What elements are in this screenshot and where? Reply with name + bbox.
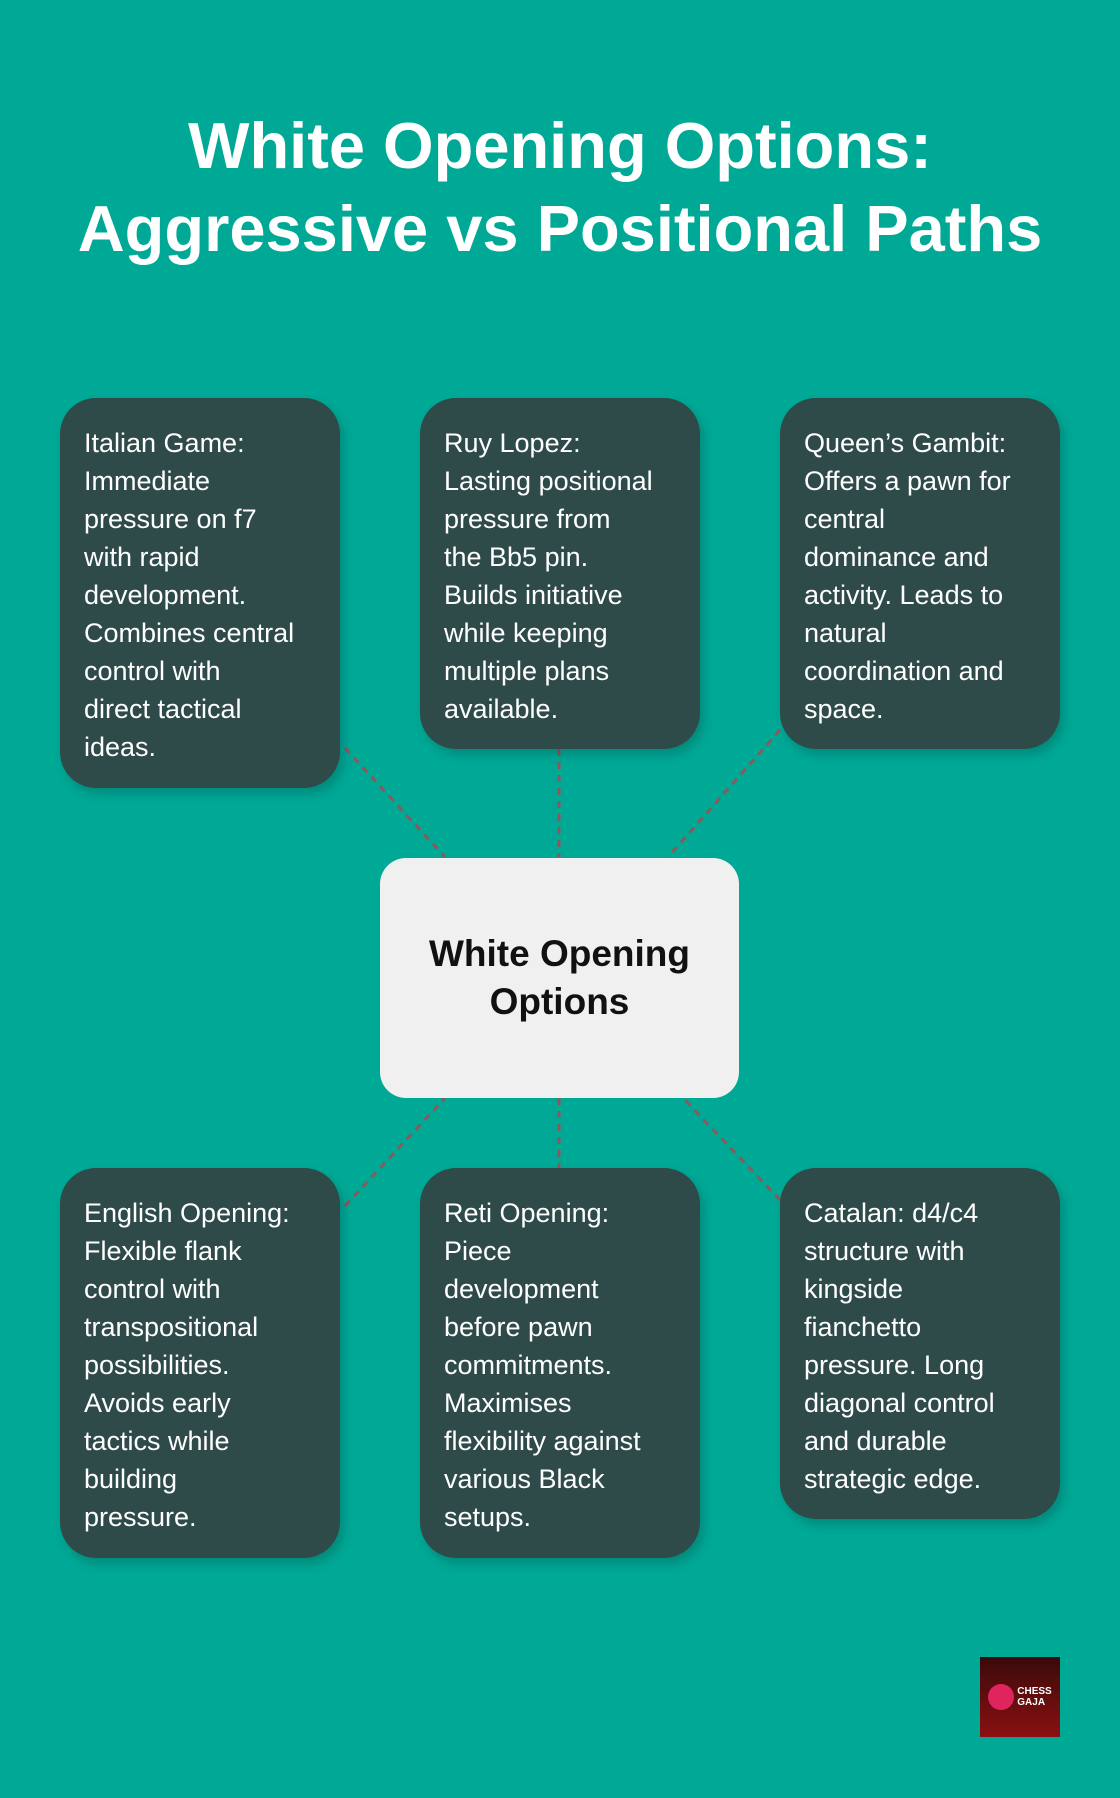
panel: Queen's Gambit: natural: [804, 618, 887, 648]
panel: Ruy Lopez: Lasting positional: [444, 466, 653, 496]
panel: Italian Game: Italian Game:: [84, 428, 245, 458]
panel: Reti Opening: Piece: [444, 1236, 512, 1266]
panel: Catalan: diagonal control: [804, 1388, 995, 1418]
panel: Catalan: fianchetto: [804, 1312, 921, 1342]
panel: Queen's Gambit: dominance and: [804, 542, 989, 572]
panel: English Opening: tactics while: [84, 1426, 230, 1456]
panel: Reti Opening: Reti Opening:: [444, 1198, 609, 1228]
panel: Italian Game: with rapid: [84, 542, 200, 572]
panel: Catalan: kingside: [804, 1274, 903, 1304]
panel: Reti Opening: flexibility against: [444, 1426, 641, 1456]
center node: White Opening: [429, 933, 690, 974]
panel: Queen's Gambit: [780, 398, 1060, 749]
panel: Reti Opening: before pawn: [444, 1312, 593, 1342]
panel: Reti Opening: setups.: [444, 1502, 531, 1532]
panel: Catalan: pressure. Long: [804, 1350, 984, 1380]
panel: Reti Opening: Maximises: [444, 1388, 572, 1418]
panel: Italian Game: control with: [84, 656, 221, 686]
panel: English Opening: transpositional: [84, 1312, 258, 1342]
panel: Reti Opening: [420, 1168, 700, 1558]
panel: Reti Opening: various Black: [444, 1464, 605, 1494]
panel: Queen's Gambit: activity. Leads to: [804, 580, 1003, 610]
panel: Italian Game: Immediate: [84, 466, 210, 496]
panel: Ruy Lopez: while keeping: [444, 618, 608, 648]
panel: Italian Game: [60, 398, 340, 788]
panel: Catalan: and durable: [804, 1426, 947, 1456]
title: White Opening Options:: [188, 109, 932, 182]
panel: English Opening: pressure.: [84, 1502, 197, 1532]
title: Aggressive vs Positional Paths: [78, 192, 1042, 265]
panel: English Opening: [60, 1168, 340, 1558]
panel: English Opening: Flexible flank: [84, 1236, 242, 1266]
panel: Queen's Gambit: Queen’s Gambit:: [804, 428, 1006, 458]
panel: Ruy Lopez: pressure from: [444, 504, 611, 534]
panel: Reti Opening: commitments.: [444, 1350, 612, 1380]
panel: Queen's Gambit: coordination and: [804, 656, 1004, 686]
panel: Italian Game: ideas.: [84, 732, 156, 762]
panel: Italian Game: Combines central: [84, 618, 294, 648]
panel: Ruy Lopez: Ruy Lopez:: [444, 428, 581, 458]
panel: English Opening: English Opening:: [84, 1198, 290, 1228]
panel: Catalan: strategic edge.: [804, 1464, 981, 1494]
panel: Italian Game: development.: [84, 580, 246, 610]
center node: Options: [490, 981, 629, 1022]
panel: Catalan: [780, 1168, 1060, 1519]
panel: Ruy Lopez: Builds initiative: [444, 580, 623, 610]
panel: Catalan: structure with: [804, 1236, 965, 1266]
panel: Ruy Lopez: the Bb5 pin.: [444, 542, 588, 572]
logo: CHESS: [1017, 1686, 1052, 1697]
logo: [980, 1657, 1060, 1737]
panel: English Opening: building: [84, 1464, 177, 1494]
panel: English Opening: Avoids early: [84, 1388, 231, 1418]
center node: [380, 858, 739, 1098]
panel: Catalan: Catalan: d4/c4: [804, 1198, 978, 1228]
logo: GAJA: [1017, 1697, 1045, 1708]
panel: Ruy Lopez: available.: [444, 694, 558, 724]
panel: Italian Game: direct tactical: [84, 694, 242, 724]
panel: Ruy Lopez: multiple plans: [444, 656, 609, 686]
panel: English Opening: control with: [84, 1274, 221, 1304]
panel: Italian Game: pressure on f7: [84, 504, 257, 534]
panel: Reti Opening: development: [444, 1274, 599, 1304]
title: [78, 109, 1042, 265]
panel: Queen's Gambit: space.: [804, 694, 884, 724]
panel: English Opening: possibilities.: [84, 1350, 230, 1380]
panel: Ruy Lopez: [420, 398, 700, 749]
panel: Queen's Gambit: central: [804, 504, 885, 534]
panel: Queen's Gambit: Offers a pawn for: [804, 466, 1011, 496]
